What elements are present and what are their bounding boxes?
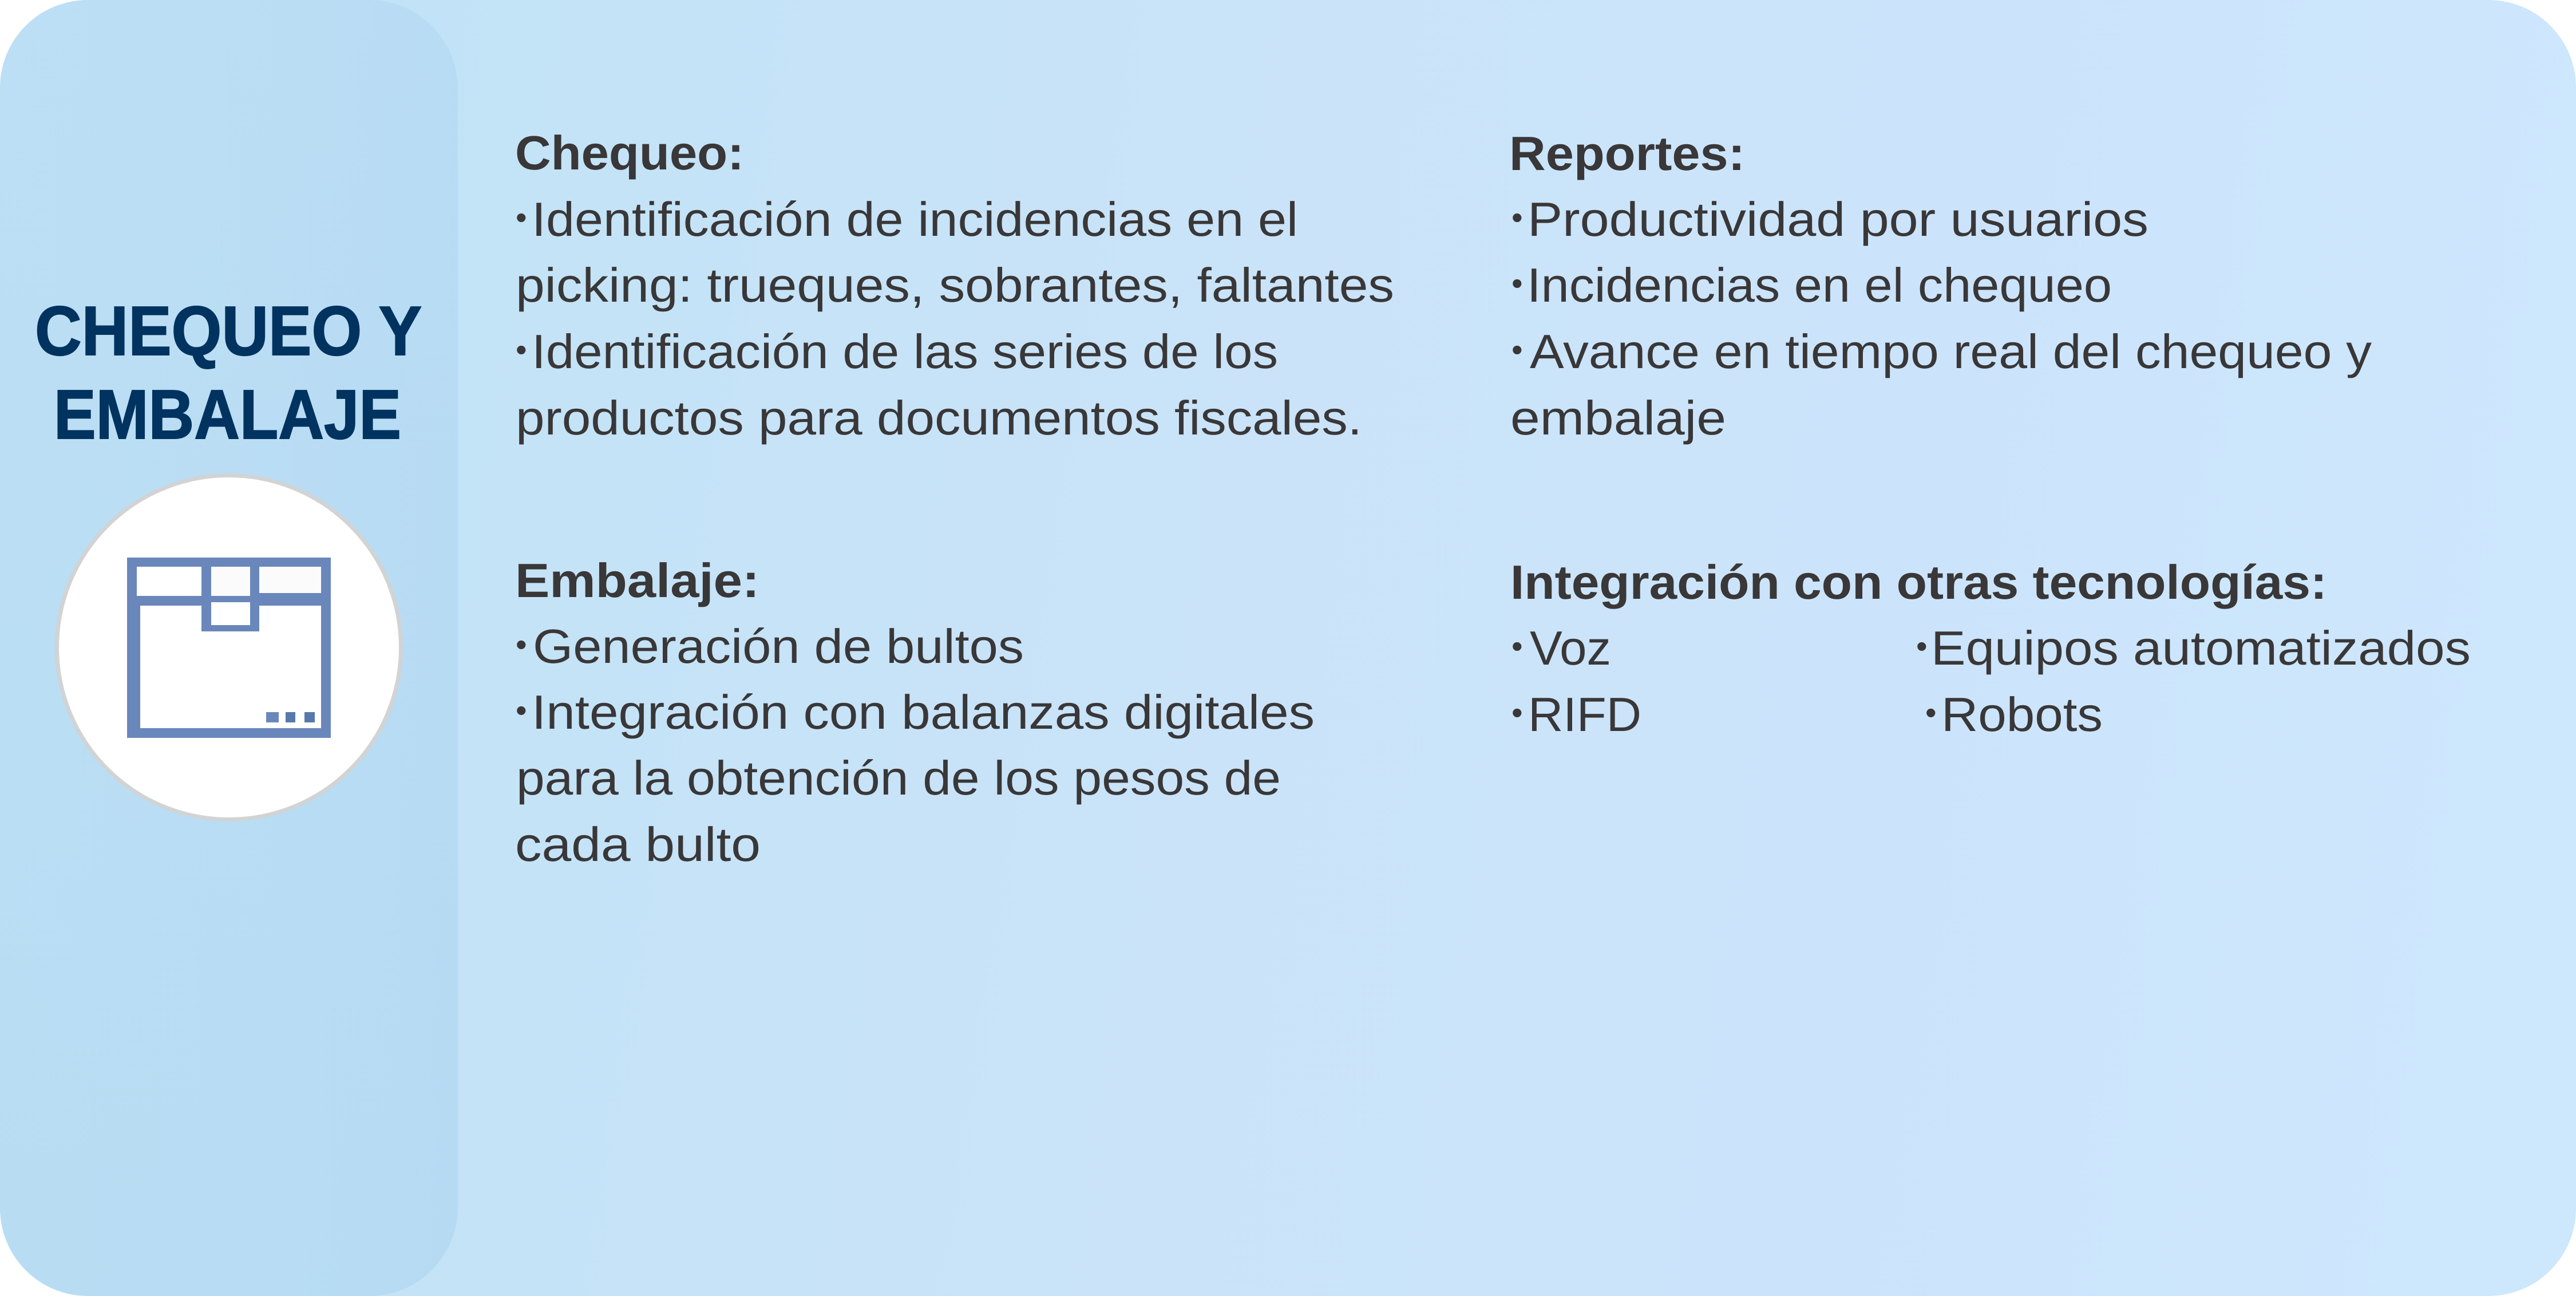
list: technologies [1511,621,2471,741]
heading: Embalaje: Embalaje: [515,554,759,607]
list: Chequeo items: Identificación de las series de los [532,325,1278,378]
list: technologies: • [1511,628,1523,664]
list: Embalaje items: Generación de bultos [533,619,1024,673]
list: Embalaje items: cada bulto [515,817,761,871]
list: technologies: Robots [1941,687,2103,741]
list: Embalaje items: • [516,626,527,662]
list: Chequeo items: • [516,331,527,368]
list: Chequeo items: Identificación de incidencias en el [532,192,1298,246]
sidebar title: CHEQUEO Y [35,292,422,370]
heading: Integración con otras tecnologías: Integración con otras tecnologías: [1510,555,2327,609]
text block: Reportes [1509,127,2372,445]
list: Embalaje items [515,619,1315,871]
list: technologies: • [1511,694,1523,730]
text block: Integración con otras tecnologías [1510,555,2471,741]
list: Embalaje items: • [516,692,527,728]
heading: Reportes: Reportes: [1509,127,1745,180]
list: Chequeo items: • [516,199,527,235]
list: Reportes items: Productividad por usuarios [1528,192,2148,246]
list: technologies: Equipos automatizados [1931,621,2471,675]
list: Reportes items: • [1511,199,1523,235]
list: Reportes items [1510,192,2372,445]
list: Embalaje items: para la obtención de los pesos de [516,751,1281,805]
list: Chequeo items: productos para documentos fiscales. [516,391,1362,445]
list: Reportes items: • [1511,265,1523,301]
list: technologies: Voz [1530,621,1611,675]
text block: Embalaje [515,554,1315,871]
heading: Chequeo: Chequeo: [515,126,744,180]
list: technologies: • [1925,694,1937,730]
icon: box in white circle [57,475,401,820]
list: Embalaje items: Integración con balanzas digitales [532,685,1315,739]
list: Reportes items: Avance en tiempo real del chequeo y [1530,325,2372,378]
list: Chequeo items [516,192,1394,445]
list: technologies: RIFD [1528,687,1641,741]
list: Reportes items: Incidencias en el chequeo [1527,258,2112,312]
list: Reportes items: embalaje [1510,391,1726,445]
sidebar title [35,292,422,453]
list: technologies: • [1916,628,1928,664]
icon: box [127,558,331,738]
list: Chequeo items: picking: trueques, sobrantes, faltantes [516,258,1394,312]
white circle [57,475,401,820]
sidebar title: EMBALAJE [54,376,401,453]
left sidebar panel [0,0,458,1296]
list: Reportes items: • [1511,331,1523,368]
text block: Chequeo [515,126,1394,445]
